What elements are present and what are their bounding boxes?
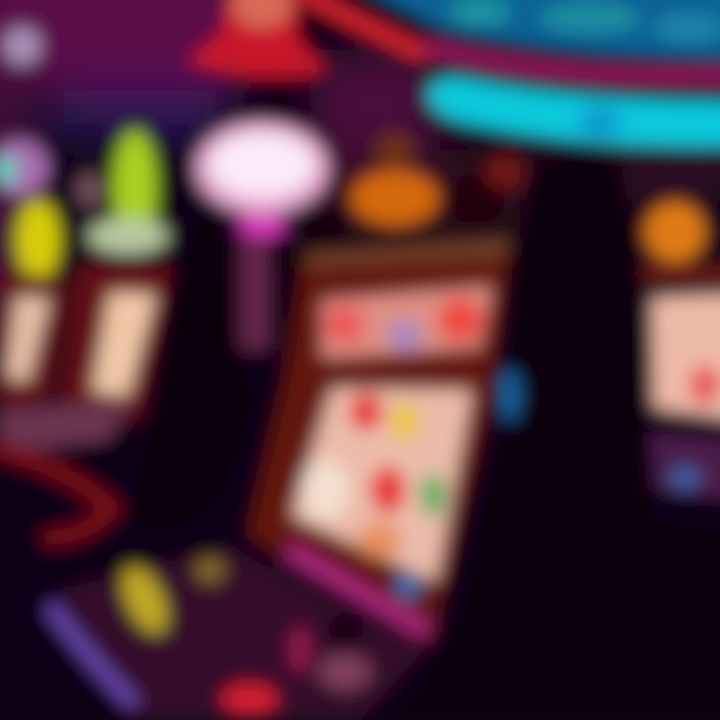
left machine: top lights <box>0 130 168 280</box>
blue reflection on silhouette <box>499 369 521 421</box>
centre machine: cabinet <box>248 238 510 645</box>
dark silhouette: left person <box>130 215 250 530</box>
left machine: screens <box>6 292 156 396</box>
ceiling light: pale blob top left <box>3 27 41 65</box>
background glow: purple ceiling <box>0 0 720 320</box>
centre machine: lower screen <box>292 388 472 600</box>
button panel <box>50 548 425 720</box>
ceiling sign: red and magenta edge <box>305 0 720 77</box>
red lamp shade <box>186 0 328 77</box>
right machine: topper <box>642 202 720 280</box>
orange toppers: centre <box>303 134 525 243</box>
ceiling sign: blue and teal arc <box>350 0 720 58</box>
glowing white lamp <box>196 122 328 350</box>
left machine: frames <box>0 265 172 450</box>
dark silhouette: central person <box>400 152 720 720</box>
left machine: red base <box>0 450 112 538</box>
right machine: screen <box>650 294 720 500</box>
centre machine: magenta lower edge <box>288 550 428 632</box>
centre machine: upper screen <box>322 286 492 358</box>
ceiling sign: cyan neon band <box>428 78 720 147</box>
